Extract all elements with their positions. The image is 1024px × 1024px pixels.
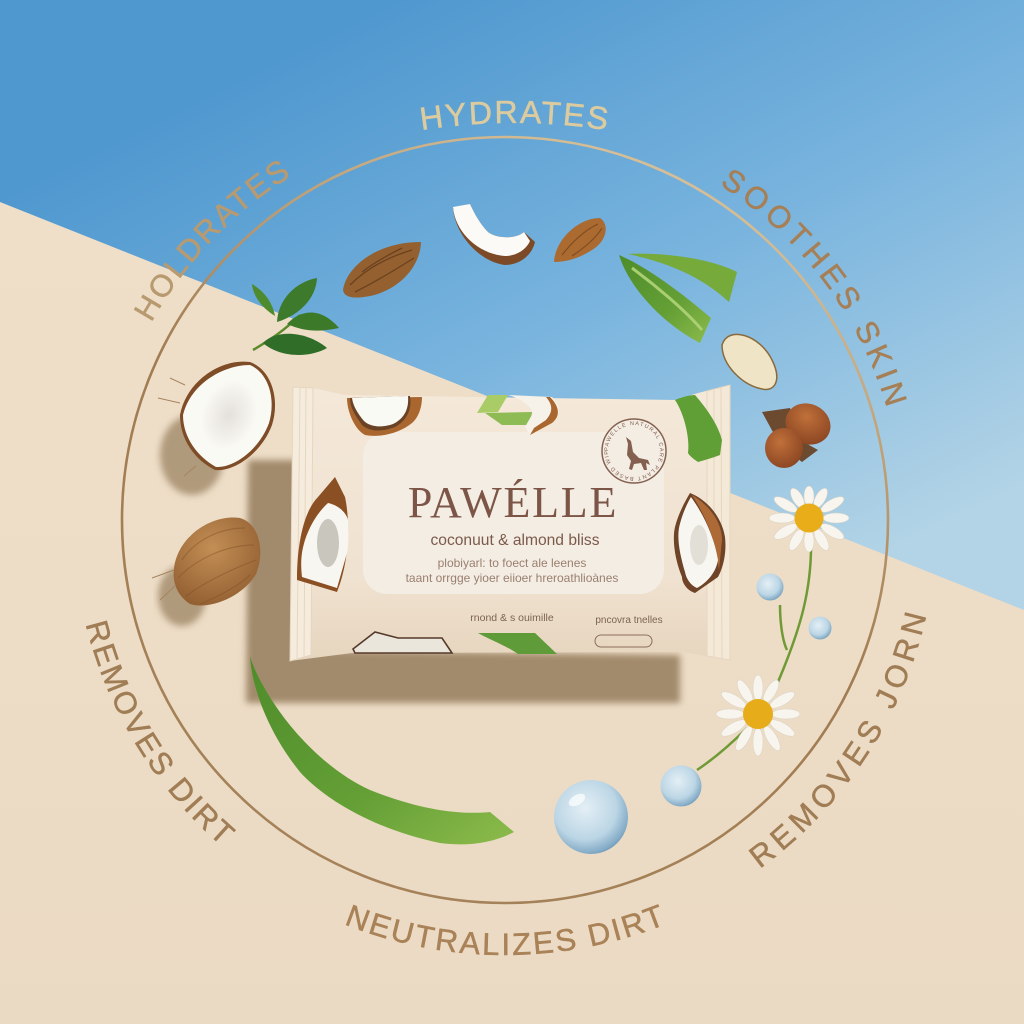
pack coconut left xyxy=(297,477,348,592)
almond slice xyxy=(722,334,777,389)
pack body xyxy=(290,385,730,661)
label: removes dirt lower left: REMOVES DIRT xyxy=(86,620,236,842)
stamp xyxy=(601,418,667,484)
chamomile upper xyxy=(769,486,849,682)
coconut half top left with shadow xyxy=(158,362,275,495)
footer text right: pncovra tnelles xyxy=(595,615,663,626)
description line two: taant orrgge yioer eiioer hreroathlioànes xyxy=(406,571,618,585)
label panel xyxy=(363,432,664,594)
pack coconut top xyxy=(347,396,422,436)
chamomile lower xyxy=(697,675,800,770)
pack aloe bottom xyxy=(478,633,557,654)
whole coconut with shadow xyxy=(152,518,260,626)
small footer badge xyxy=(595,635,652,647)
circular ring xyxy=(122,137,888,903)
product subtitle: coconuut & almond bliss xyxy=(430,532,600,549)
water drops xyxy=(554,574,832,854)
hazelnuts xyxy=(762,396,837,468)
label: hydrates top: HYDRATES xyxy=(420,100,608,130)
pack coconut bottom xyxy=(353,632,452,653)
almond top right xyxy=(554,218,606,262)
label: neutralizes dirt bottom: NEUTRALIZES DIRT xyxy=(346,904,660,956)
coconut piece top xyxy=(453,204,535,265)
almond left xyxy=(343,242,421,298)
stamp: PAWELLE NATURAL CARE PLANT BASED WIPES xyxy=(604,421,664,481)
label: soothes skin right: SOOTHES SKIN xyxy=(722,170,907,406)
label: removes jorn lower right: REMOVES JORN xyxy=(748,612,926,868)
aloe slices top right xyxy=(619,254,737,343)
pack left crimp xyxy=(290,387,313,661)
pack coconut right xyxy=(674,493,725,593)
pack aloe and coconut top xyxy=(477,395,559,435)
footer text left: rnond & s ouimille xyxy=(470,612,554,624)
product pack xyxy=(290,384,730,662)
description line one: plobiyarl: to foect ale leenes xyxy=(438,556,586,570)
pack leaf right xyxy=(675,395,722,462)
leaf sprig xyxy=(252,278,339,355)
brand name: PAWÉLLE xyxy=(408,478,618,527)
aloe leaf large xyxy=(250,656,514,844)
pack shadow xyxy=(246,460,680,703)
label: holdrates left: HOLDRATES xyxy=(134,161,288,321)
pack right crimp xyxy=(707,385,730,660)
